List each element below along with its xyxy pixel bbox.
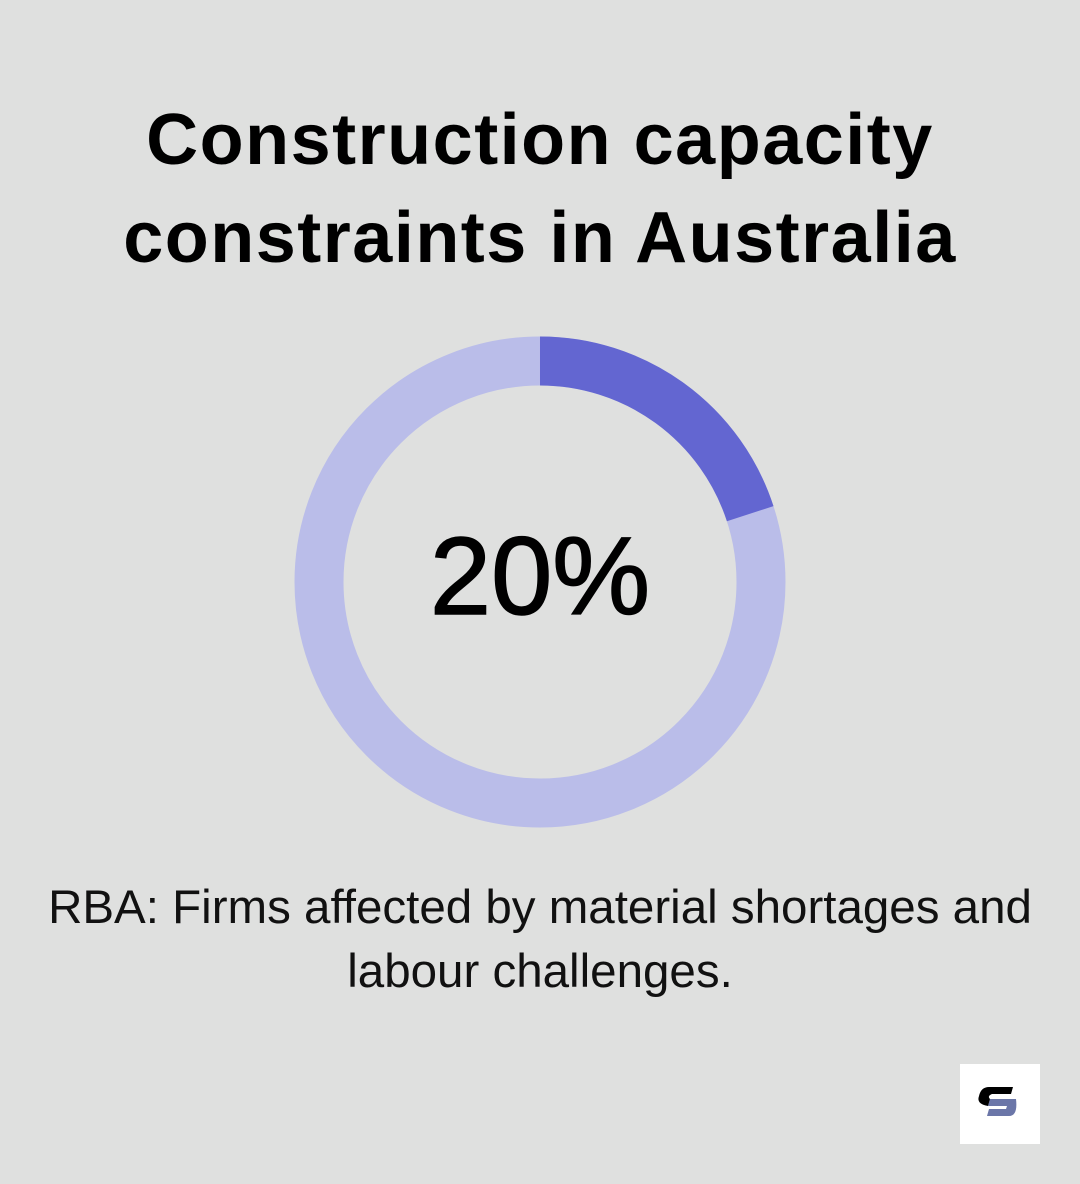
title: Construction capacity	[146, 100, 934, 180]
caption: labour challenges.	[347, 945, 733, 998]
caption: RBA: Firms affected by material shortages and	[48, 881, 1032, 934]
caption	[48, 881, 1032, 998]
donut chart: 20%	[430, 515, 650, 638]
title	[123, 100, 957, 278]
logo	[960, 1064, 1040, 1144]
title: constraints in Australia	[123, 198, 957, 278]
